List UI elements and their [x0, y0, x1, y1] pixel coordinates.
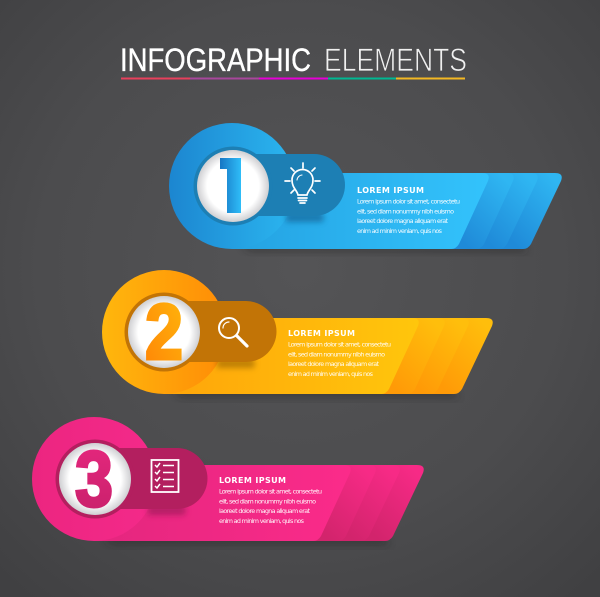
text block — [288, 329, 391, 378]
ribbon — [94, 465, 424, 541]
text block: LOREM IPSUM — [357, 186, 424, 195]
number disc — [124, 292, 204, 372]
number 3: 3 — [75, 434, 113, 523]
text block: elit, sed diam nonummy nibh euismo — [357, 208, 454, 216]
text block: LOREM IPSUM — [219, 476, 286, 485]
text block: elit, sed diam nonummy nibh euismo — [219, 498, 316, 506]
panel: step 1 blue — [169, 123, 562, 252]
number disc — [194, 146, 272, 226]
text block: Lorem ipsum dolor sit amet, consectetu — [219, 488, 322, 496]
title — [120, 42, 467, 78]
pill — [95, 448, 208, 509]
pill — [233, 154, 345, 216]
text block: laoreet dolore magna aliquam erat — [357, 217, 448, 225]
text block — [219, 476, 322, 525]
icon: checklist — [152, 460, 178, 492]
pill shadow — [148, 506, 186, 515]
title underline — [121, 78, 465, 80]
text block: enim ad minim veniam, quis nos — [288, 370, 374, 378]
text block: laoreet dolore magna aliquam erat — [219, 507, 310, 515]
title: INFOGRAPHIC — [120, 42, 311, 78]
ribbon — [232, 173, 562, 249]
panel: step 3 pink — [32, 417, 424, 545]
text block: Lorem ipsum dolor sit amet, consectetu — [357, 198, 460, 206]
text block: elit, sed diam nonummy nibh euismo — [288, 350, 385, 358]
number 2: 2 — [145, 287, 183, 376]
big circle — [32, 417, 156, 541]
ribbon shadow — [240, 245, 528, 252]
text block: laoreet dolore magna aliquam erat — [288, 360, 379, 368]
pill shadow — [217, 359, 255, 368]
text block: Lorem ipsum dolor sit amet, consectetu — [288, 340, 391, 348]
text block: enim ad minim veniam, quis nos — [357, 227, 443, 235]
ribbon shadow — [102, 537, 390, 545]
text block: LOREM IPSUM — [288, 329, 355, 338]
big circle — [169, 123, 295, 249]
number 1: 1 — [211, 141, 255, 230]
ribbon shadow — [171, 390, 459, 398]
panel: step 2 orange — [102, 270, 493, 398]
text block: enim ad minim veniam, quis nos — [219, 517, 305, 525]
pill — [164, 301, 276, 362]
title: ELEMENTS — [324, 42, 467, 78]
icon: light bulb — [285, 163, 320, 203]
big circle — [102, 270, 226, 394]
ribbon — [164, 318, 493, 394]
text block — [357, 186, 460, 235]
pill shadow — [286, 213, 324, 222]
icon: magnifier — [219, 318, 247, 346]
number disc — [56, 440, 134, 518]
number 1 — [220, 158, 241, 213]
